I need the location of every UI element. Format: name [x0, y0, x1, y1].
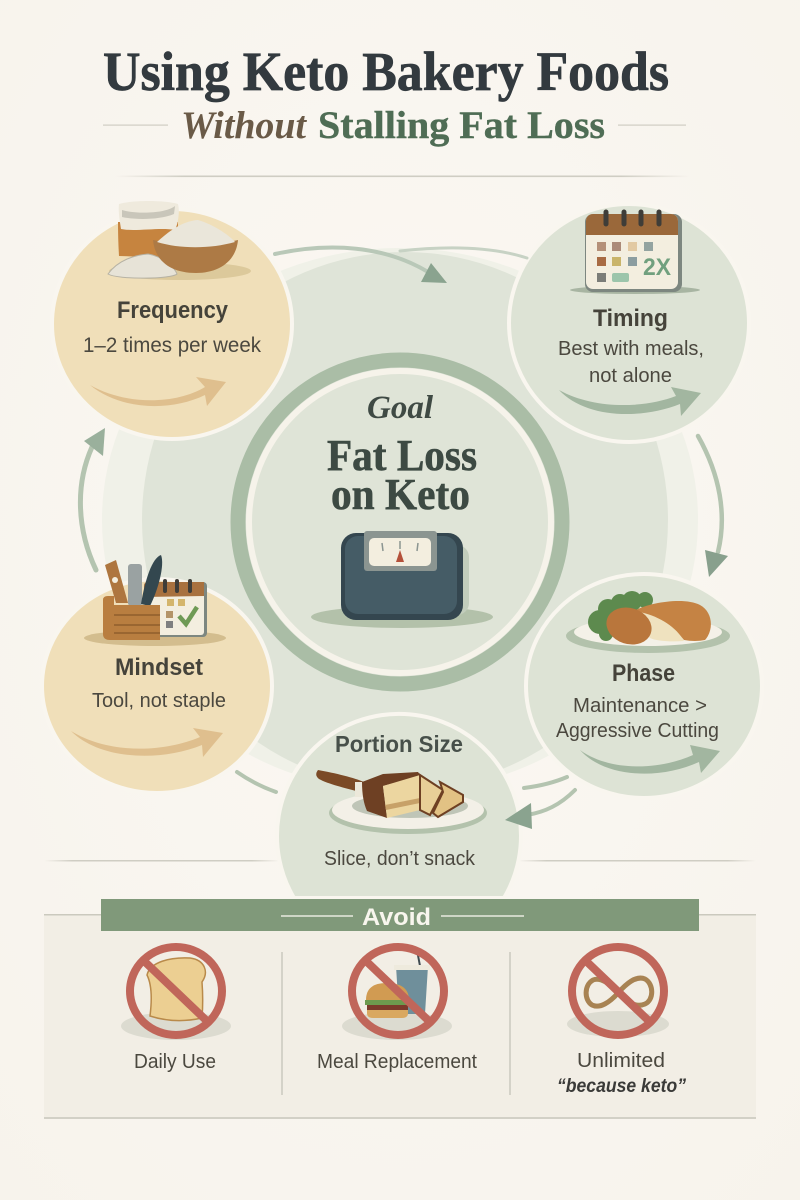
icon: tools and calendar [84, 555, 226, 646]
text: phase detail: Maintenance > [573, 695, 707, 717]
icon: bathroom scale [311, 531, 493, 628]
item: unlimited because keto: “because keto” [557, 1076, 686, 1097]
panel: timing [509, 204, 749, 442]
text: phase detail: Aggressive Cutting [556, 720, 719, 742]
item: meal replacement: Meal Replacement [317, 1051, 477, 1073]
arrow: timing [559, 387, 701, 416]
text: timing detail [558, 338, 704, 387]
title: Using Keto Bakery Foods [103, 41, 669, 102]
panel: portion size [277, 714, 521, 898]
text: portion size detail: Slice, don’t snack [324, 848, 476, 870]
subtitle [103, 104, 686, 147]
item: unlimited because keto: Unlimited [577, 1050, 665, 1072]
avoid banner [101, 899, 699, 931]
arrow: frequency to timing [275, 248, 527, 283]
arrow: mindset to frequency [80, 428, 105, 570]
icon: calendar: 2X [643, 254, 671, 281]
heading: frequency: Frequency [117, 297, 229, 324]
heading: mindset: Mindset [115, 654, 203, 681]
text: frequency detail: 1–2 times per week [83, 334, 261, 357]
arrow: phase [580, 745, 720, 774]
panel: frequency [52, 201, 292, 439]
heading: phase: Phase [612, 660, 675, 687]
text: timing detail: Best with meals, [558, 338, 704, 360]
icon: flour sack and bowl [108, 201, 251, 280]
arrow: phase to portion size [505, 777, 575, 829]
arrow: frequency [90, 377, 226, 406]
item: daily use: Daily Use [134, 1051, 216, 1073]
goal heading: on Keto [331, 470, 470, 519]
panel: mindset [42, 555, 272, 793]
heading: timing: Timing [593, 305, 668, 332]
panel: phase [526, 574, 762, 798]
arrow: portion size to mindset [237, 772, 276, 792]
goal heading [327, 431, 477, 519]
arrow: timing to phase [698, 436, 728, 577]
heading: portion size: Portion Size [335, 731, 463, 757]
subtitle: Without [181, 104, 307, 147]
background cycle disc [102, 248, 698, 792]
center goal circle [238, 360, 562, 684]
avoid banner: Avoid [362, 904, 431, 931]
item: unlimited because keto [557, 947, 686, 1097]
icon: plate with bread and greens [566, 591, 730, 653]
text: timing detail: not alone [589, 365, 672, 387]
text: phase detail [556, 695, 719, 742]
item: daily use [121, 947, 231, 1073]
icon: calendar [570, 212, 700, 294]
icon: sliced loaf on plate [316, 770, 487, 834]
item: meal replacement [317, 947, 477, 1073]
goal label: Goal [367, 390, 434, 426]
text: mindset detail: Tool, not staple [92, 690, 226, 712]
subtitle: Stalling Fat Loss [318, 104, 605, 147]
goal heading: Fat Loss [327, 431, 477, 480]
panel: avoid [44, 899, 756, 1119]
arrow: mindset [71, 728, 223, 757]
